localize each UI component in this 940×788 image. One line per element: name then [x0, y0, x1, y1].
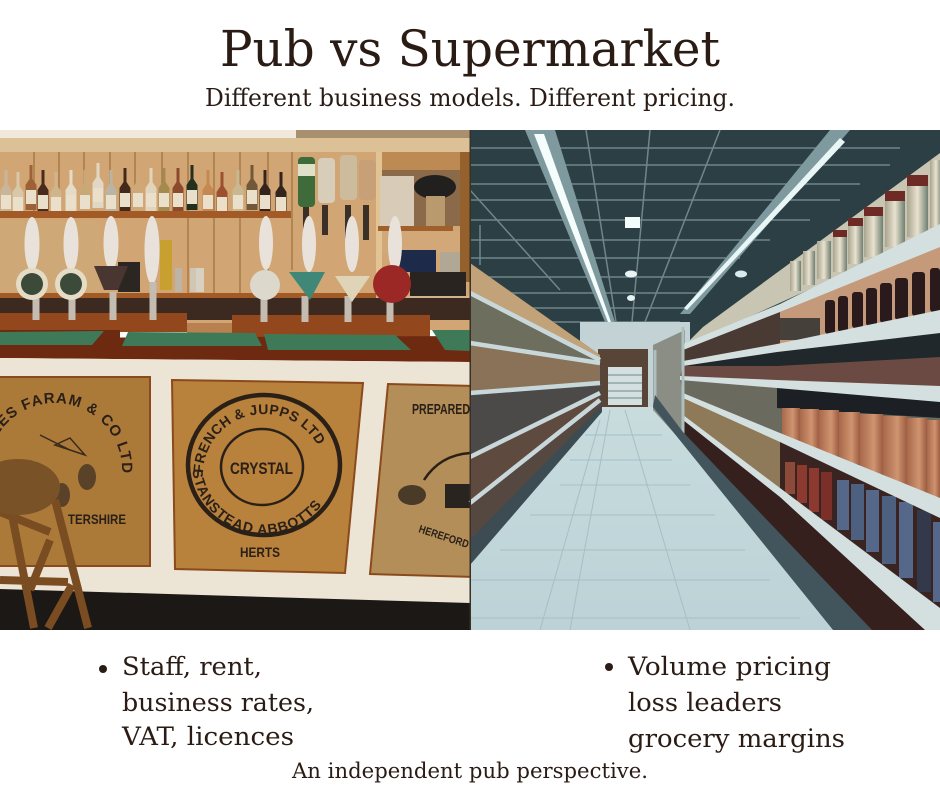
floor — [470, 407, 833, 630]
footer tagline: An independent pub perspective. — [291, 759, 648, 783]
bullet list: pub costs: Staff, rent, — [122, 652, 262, 681]
ceiling — [470, 130, 940, 365]
burlap panel right: HEREFORD — [417, 523, 470, 551]
right cupboard — [376, 152, 470, 296]
burlap panel centre: STANSTEAD ABBOTTS — [192, 470, 320, 533]
back wall — [580, 322, 690, 412]
shelf rails — [655, 224, 940, 630]
beer pumps — [16, 216, 411, 322]
blue and red bottles fifth shelf — [785, 462, 940, 602]
back aisle door — [598, 349, 648, 407]
bullet list: pub costs — [99, 652, 314, 751]
subtitle: Different business models. Different pricing. — [205, 84, 735, 112]
panel: pub photo — [0, 130, 470, 630]
right aisle end unit — [653, 330, 685, 445]
lower shelf — [0, 211, 291, 218]
burlap panel centre: HERTS — [240, 544, 280, 560]
burlap panel right — [370, 384, 475, 577]
ceiling lights — [525, 130, 850, 322]
burlap panel centre: CRYSTAL — [230, 459, 293, 478]
right shelves — [680, 153, 940, 630]
bullet list: supermarket pricing: Volume pricing — [627, 652, 831, 681]
burlap panel left: TERSHIRE — [68, 511, 126, 527]
shelf base — [653, 395, 872, 630]
left shelves — [470, 263, 602, 565]
bullet list: supermarket pricing: loss leaders — [628, 688, 782, 717]
panel: supermarket photo — [470, 130, 940, 630]
dark bottles second shelf — [780, 268, 940, 340]
bullet list: pub costs: business rates, — [122, 688, 314, 717]
back wall wood — [0, 130, 470, 330]
bar front — [0, 358, 470, 604]
bullet list: supermarket pricing: grocery margins — [628, 724, 845, 753]
burlap panel centre: FRENCH & JUPPS LTD — [193, 404, 324, 472]
bar top and mats — [0, 330, 470, 362]
burlap panel right: PREPARED — [412, 401, 470, 418]
lower back bar — [0, 293, 470, 320]
tins and glassware under shelf — [0, 222, 204, 292]
burlap panel left — [0, 376, 151, 567]
bullet list: supermarket pricing — [605, 652, 845, 753]
jars on top shelf — [790, 160, 940, 291]
floor — [0, 589, 470, 630]
stool — [0, 459, 88, 628]
photo divider — [470, 130, 471, 630]
bar trays — [0, 313, 430, 338]
title: Pub vs Supermarket — [220, 20, 720, 78]
orange cans fourth shelf — [782, 408, 940, 500]
hanging spirit bottles — [298, 155, 376, 240]
bottles on shelf — [0, 163, 286, 217]
burlap panel centre — [171, 379, 364, 574]
bullet list: pub costs: VAT, licences — [121, 722, 294, 751]
